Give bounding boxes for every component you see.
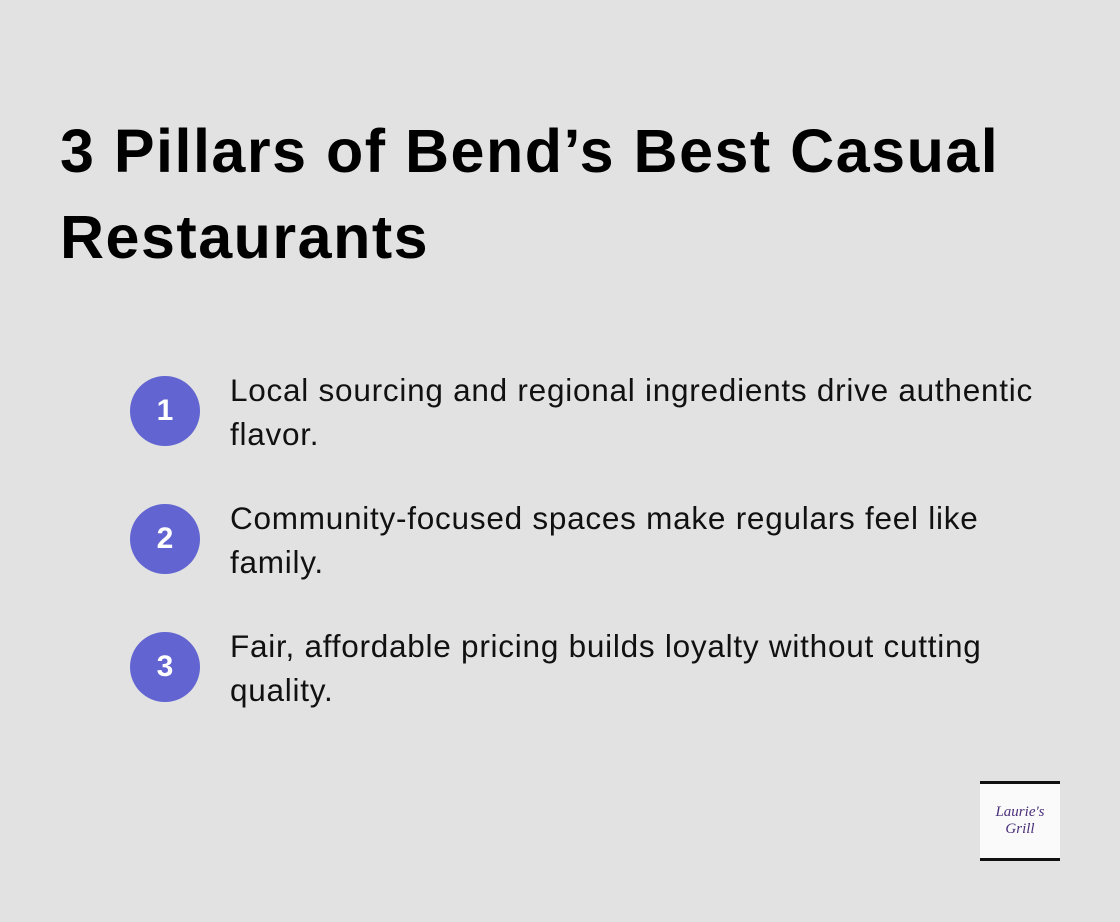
item 1: [130, 372, 1033, 452]
title: Restaurants: [60, 203, 429, 271]
text 2: Community-focused spaces make regulars feel like: [230, 500, 979, 536]
text 3: quality.: [230, 672, 333, 708]
text 3: Fair, affordable pricing builds loyalty without cutting: [230, 628, 982, 664]
logo: Grill: [1005, 821, 1035, 837]
text 1: Local sourcing and regional ingredients drive authentic: [230, 372, 1033, 408]
badge 1: [130, 376, 200, 446]
text 2: [230, 500, 979, 580]
logo: [980, 781, 1060, 861]
text 2: family.: [230, 544, 324, 580]
badge 3: 3: [157, 650, 173, 683]
logo: Laurie's: [995, 804, 1045, 820]
badge 2: 2: [157, 522, 173, 555]
badge 3: [130, 632, 200, 702]
text 1: flavor.: [230, 416, 319, 452]
text 1: [230, 372, 1033, 452]
title: 3 Pillars of Bend’s Best Casual: [60, 117, 999, 185]
text 3: [230, 628, 982, 708]
title: [60, 117, 999, 271]
item 2: [130, 500, 979, 580]
badge 2: [130, 504, 200, 574]
badge 1: 1: [157, 394, 173, 427]
item 3: [130, 628, 982, 708]
